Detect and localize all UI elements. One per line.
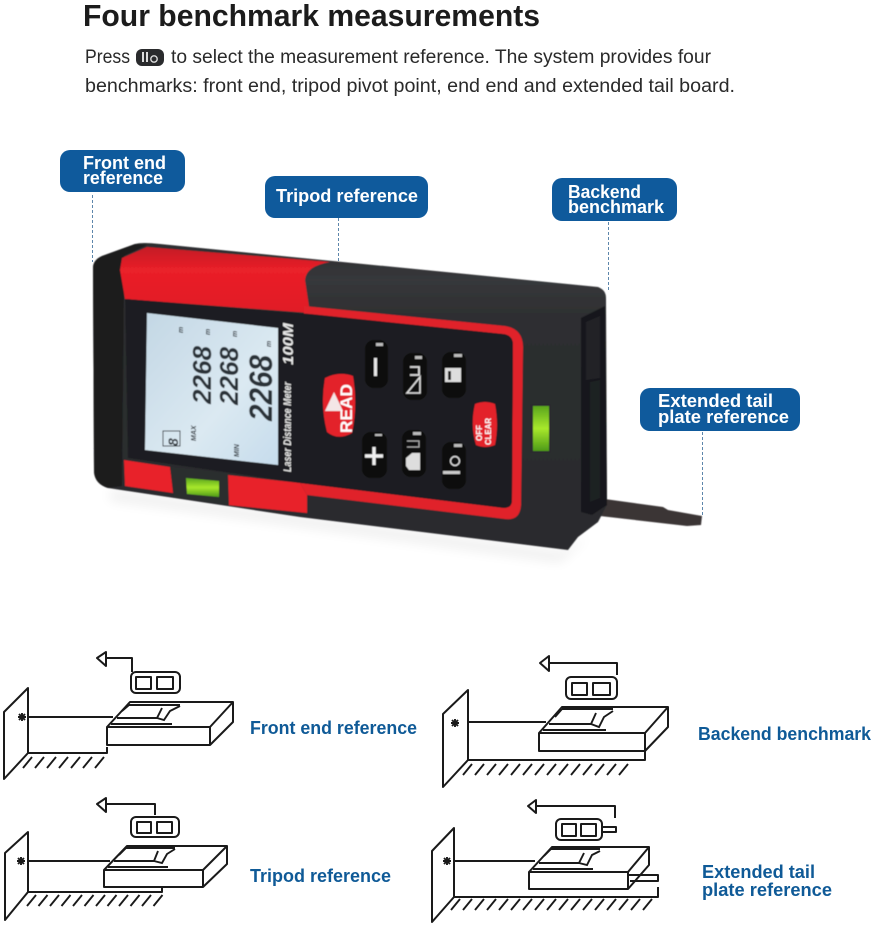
leader line: front end (92, 195, 94, 262)
floor hatching (27, 895, 162, 906)
intro text: Press (85, 47, 130, 68)
red top band (120, 247, 330, 313)
diagram: extended tail plate reference (432, 800, 658, 922)
intro text: benchmarks: front end, tripod pivot point, end end and extended tail board. (85, 76, 735, 97)
OFF CLEAR button: CLEAR (484, 418, 493, 445)
laser distance meter device (93, 243, 702, 562)
callout: backend benchmark: Backend (568, 182, 641, 202)
reference icon (131, 672, 180, 693)
model label: 100M (280, 322, 297, 365)
model label (280, 322, 297, 472)
OFF CLEAR button: OFF (475, 425, 484, 441)
callout: front end reference: reference (83, 168, 163, 188)
button: plus (362, 432, 387, 478)
laser spot (17, 857, 25, 865)
callout: front end reference (60, 150, 185, 192)
leader line: tripod (338, 218, 340, 262)
callout: tripod reference: Tripod reference (276, 186, 418, 206)
callout: backend benchmark (552, 178, 677, 221)
laser beam and floor (468, 722, 645, 760)
OFF CLEAR button (473, 402, 497, 447)
laser spot (18, 713, 26, 721)
LCD readings: m (205, 329, 212, 335)
READ button (323, 374, 356, 437)
arrow to display icon (528, 800, 615, 818)
device outline (107, 702, 233, 745)
wall (432, 828, 454, 922)
diagram: front end reference (4, 652, 233, 779)
callout: backend benchmark: benchmark (568, 197, 665, 217)
button: benchmark (442, 352, 466, 398)
leader line: extended tail (702, 432, 704, 517)
laser spot (451, 719, 459, 727)
floor hatching (463, 764, 628, 775)
device outline (529, 847, 658, 889)
LCD readings: MIN (234, 443, 241, 457)
LCD readings: m (266, 341, 273, 347)
LCD readings: m (178, 327, 185, 333)
LCD readings: m (232, 331, 239, 337)
device body (93, 243, 607, 550)
tail plate (590, 497, 702, 526)
LCD readings: MAX (191, 424, 198, 441)
arrow to display icon (97, 652, 132, 672)
diagram: backend benchmark (443, 656, 668, 787)
label: extended tail plate reference: Extended tail (702, 862, 815, 882)
leader line: backend (608, 222, 610, 292)
label: front end reference: Front end reference (250, 718, 417, 738)
label: backend benchmark: Backend benchmark (698, 724, 872, 744)
red bottom band (124, 460, 173, 493)
reference icon (556, 819, 616, 840)
LCD readings: 2268 (214, 346, 244, 406)
icon: benchmark button (136, 49, 164, 66)
left end cap (93, 244, 147, 488)
bottom bubble level (170, 467, 229, 505)
dark control panel (125, 299, 513, 508)
red frame around control panel (300, 306, 523, 519)
floor hatching (23, 757, 104, 768)
reference icon (131, 817, 179, 837)
laser beam and floor (454, 861, 658, 897)
side bubble level (530, 404, 551, 453)
callout: extended tail plate reference: plate reference (658, 407, 789, 427)
device outline (104, 846, 227, 887)
button: area (403, 353, 427, 400)
model label: Laser Distance Meter (282, 381, 294, 472)
diagram: tripod reference (5, 798, 227, 920)
callout: front end reference: Front end (83, 153, 166, 173)
laser beam and floor (28, 861, 162, 892)
label: extended tail plate reference: plate reference (702, 880, 832, 900)
wall (4, 688, 28, 779)
arrow to display icon (97, 798, 155, 815)
callout: extended tail plate reference: Extended tail (658, 391, 773, 411)
button: minus (365, 340, 388, 388)
label: tripod reference: Tripod reference (250, 866, 391, 886)
LCD readings: 2268 (243, 355, 279, 422)
wall (5, 832, 28, 920)
laser beam and floor (28, 717, 113, 753)
rear slot (581, 306, 607, 515)
button: volume (402, 430, 426, 477)
device shadow (110, 490, 590, 562)
READ button: READ (337, 384, 356, 433)
LCD screen (145, 313, 279, 465)
label: extended tail plate reference (702, 862, 832, 900)
button: timer (442, 442, 466, 489)
callout: extended tail plate reference (640, 388, 800, 431)
floor hatching (451, 899, 652, 910)
LCD readings (163, 327, 279, 457)
wall (443, 690, 468, 787)
LCD readings: 2268 (187, 345, 217, 405)
device outline (539, 707, 668, 751)
LCD readings: 8 (165, 438, 181, 446)
reference icon (566, 677, 617, 699)
intro text: to select the measurement reference. The system provides four (171, 47, 712, 68)
intro text (85, 47, 735, 97)
laser spot (443, 857, 451, 865)
callout: tripod reference (265, 176, 428, 218)
arrow to display icon (540, 656, 617, 675)
